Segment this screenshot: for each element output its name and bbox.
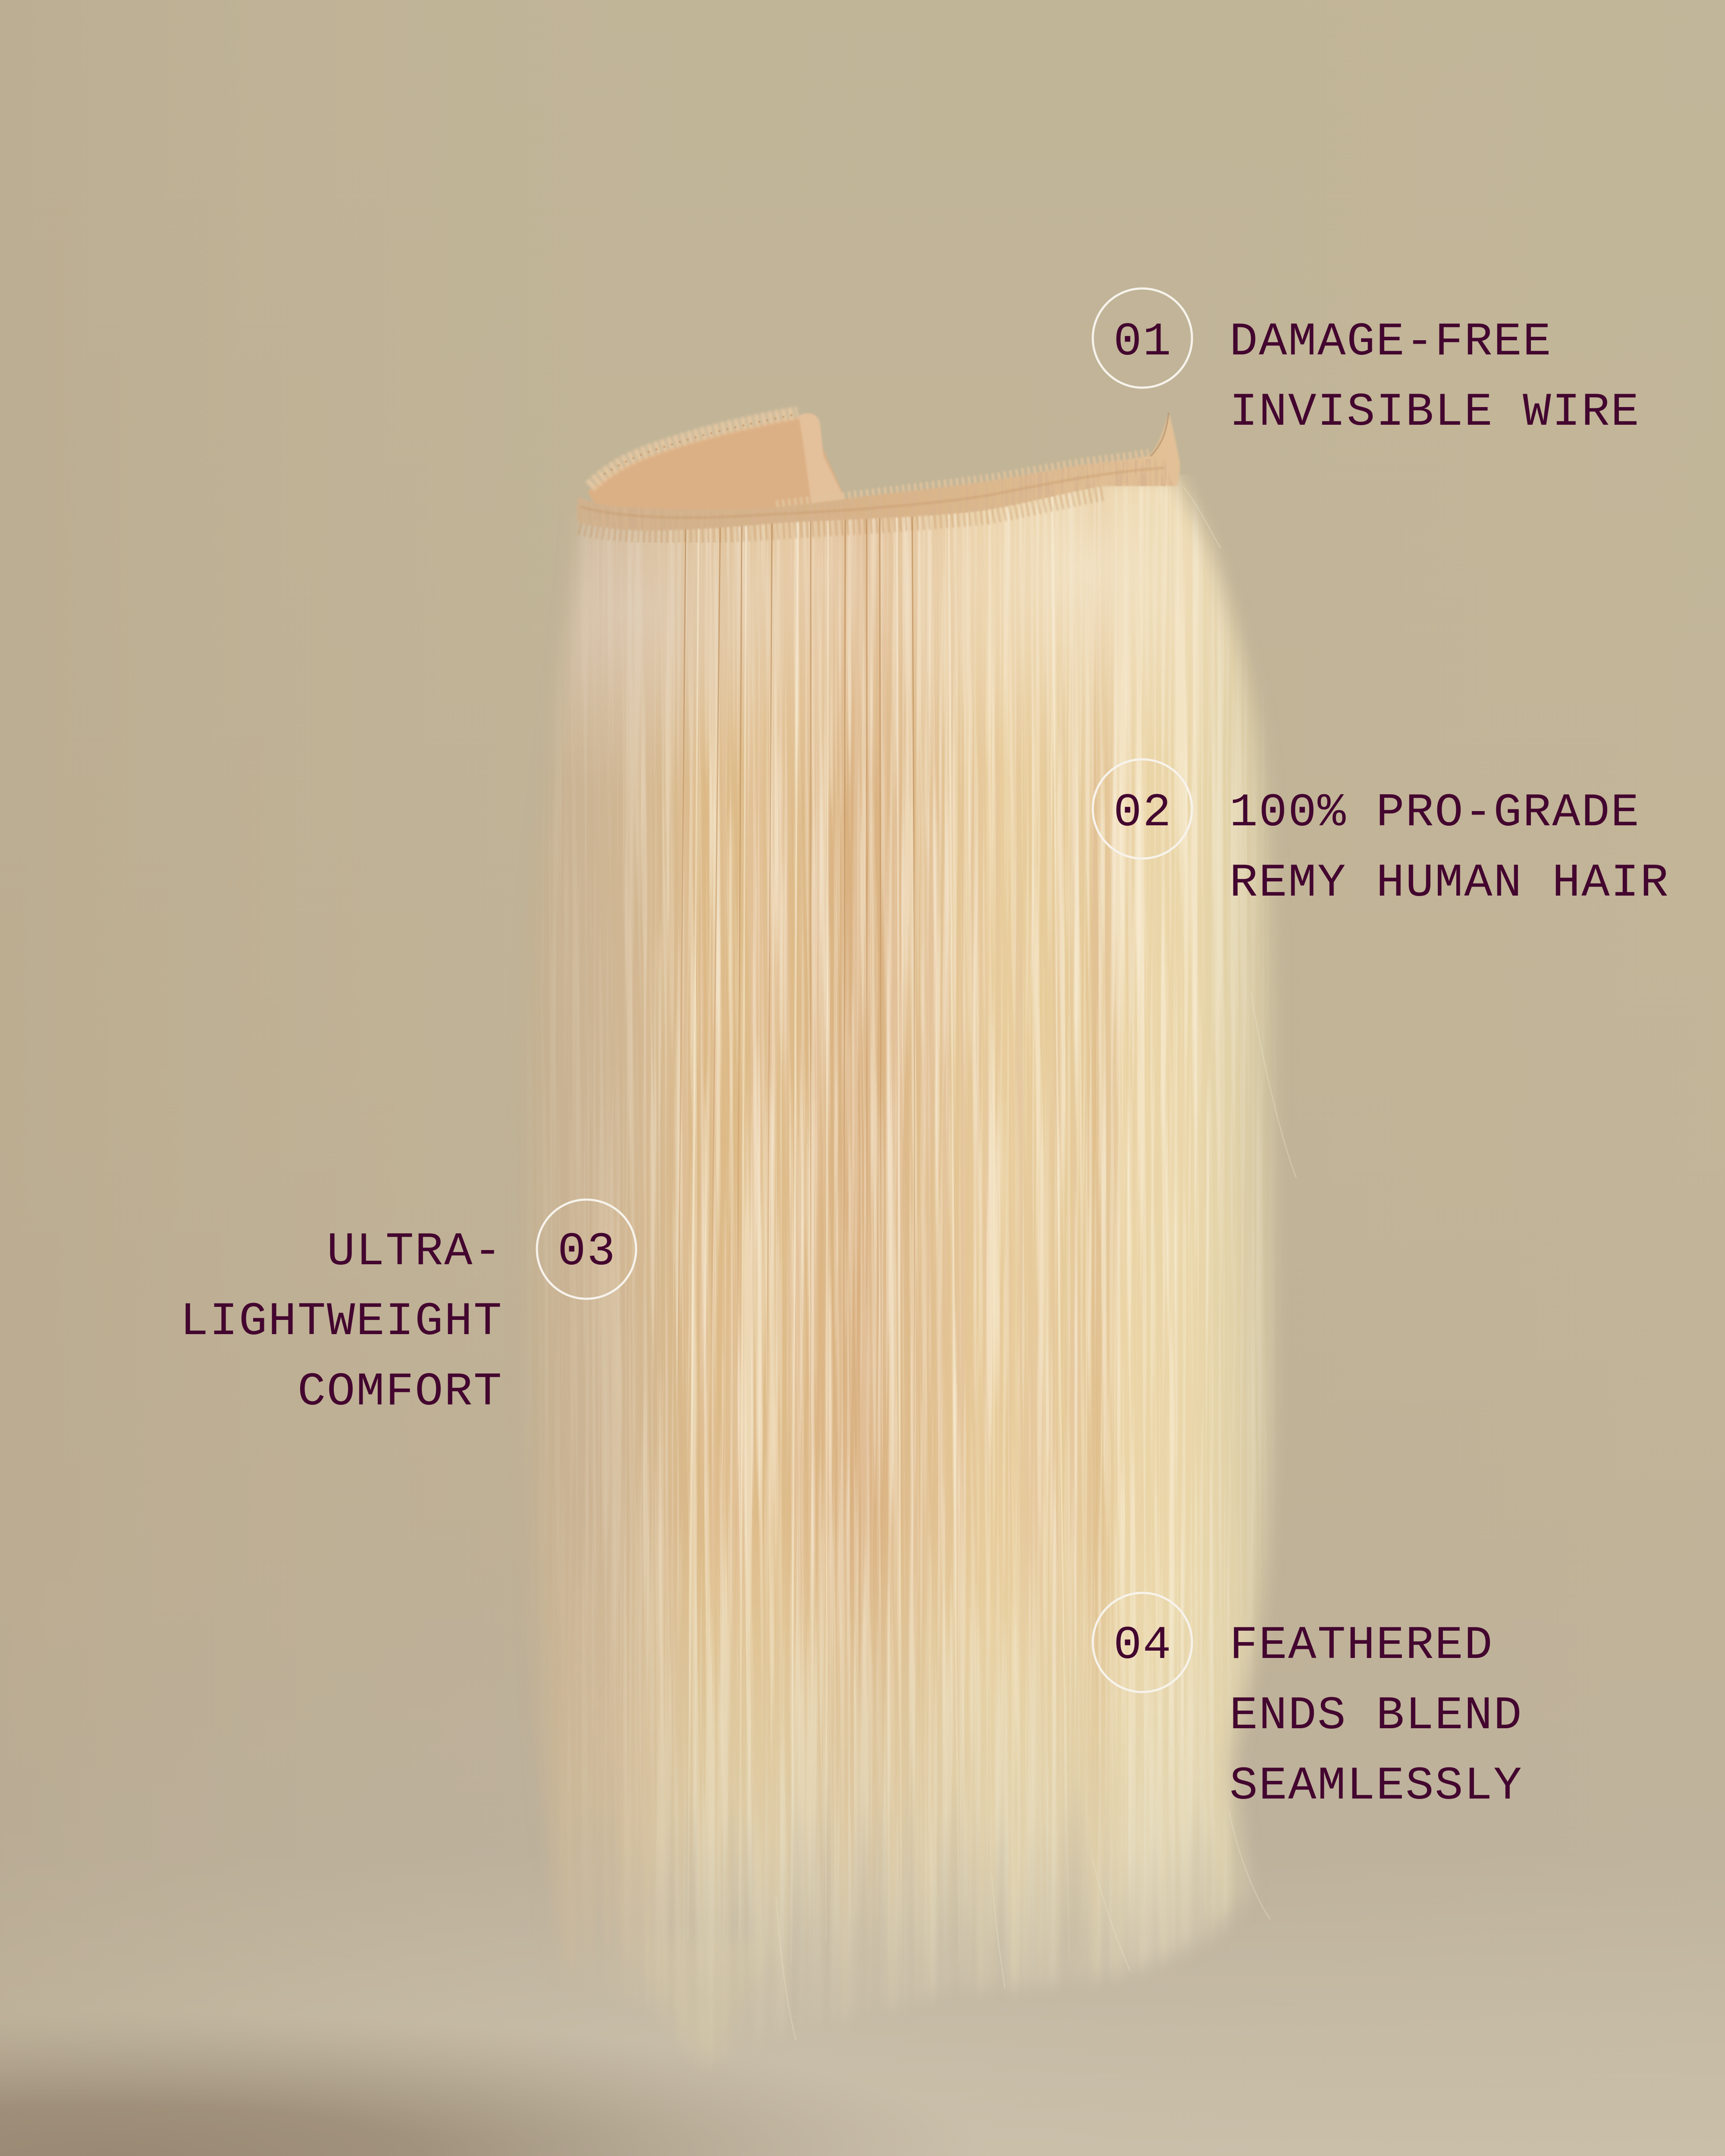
callout 03: ultra-lightweight comfort <box>180 1200 636 1419</box>
hair strands body <box>539 474 1276 2009</box>
weft seam band <box>577 413 1180 534</box>
marker 01 <box>1093 288 1192 388</box>
hanging comb threads <box>580 491 1104 534</box>
label 03: COMFORT <box>298 1365 503 1419</box>
label 02: 100% PRO-GRADE <box>1229 786 1640 840</box>
label 04: FEATHERED <box>1229 1619 1493 1672</box>
marker 04: 04 <box>1113 1619 1172 1672</box>
marker 01: 01 <box>1113 315 1172 369</box>
marker 02: 02 <box>1113 786 1172 840</box>
label 01: INVISIBLE WIRE <box>1229 385 1640 439</box>
flyaway wisps <box>776 487 1296 2040</box>
label 04: ENDS BLEND <box>1229 1689 1523 1742</box>
marker 04 <box>1093 1593 1192 1692</box>
backing panel strap <box>799 413 847 513</box>
individual strands <box>675 487 1296 2040</box>
label 01: DAMAGE-FREE <box>1229 315 1552 369</box>
feathered left tip <box>638 1940 768 2065</box>
label 02: REMY HUMAN HAIR <box>1229 856 1669 910</box>
callout 01: damage-free invisible wire <box>1093 288 1640 439</box>
marker 03 <box>537 1200 636 1299</box>
upper comb teeth <box>776 454 1149 505</box>
marker 03: 03 <box>558 1225 616 1279</box>
weft backing panel <box>588 414 847 517</box>
callout 04: feathered ends blend seamlessly <box>1093 1593 1523 1813</box>
marker 02 <box>1093 759 1192 859</box>
callout 02: 100% pro-grade remy human hair <box>1093 759 1669 910</box>
panel lace edge <box>590 413 798 486</box>
label 03: LIGHTWEIGHT <box>180 1295 503 1348</box>
label 03: ULTRA- <box>327 1225 503 1279</box>
hair extension photo illustration <box>474 413 1315 2113</box>
label 04: SEAMLESSLY <box>1229 1759 1523 1813</box>
